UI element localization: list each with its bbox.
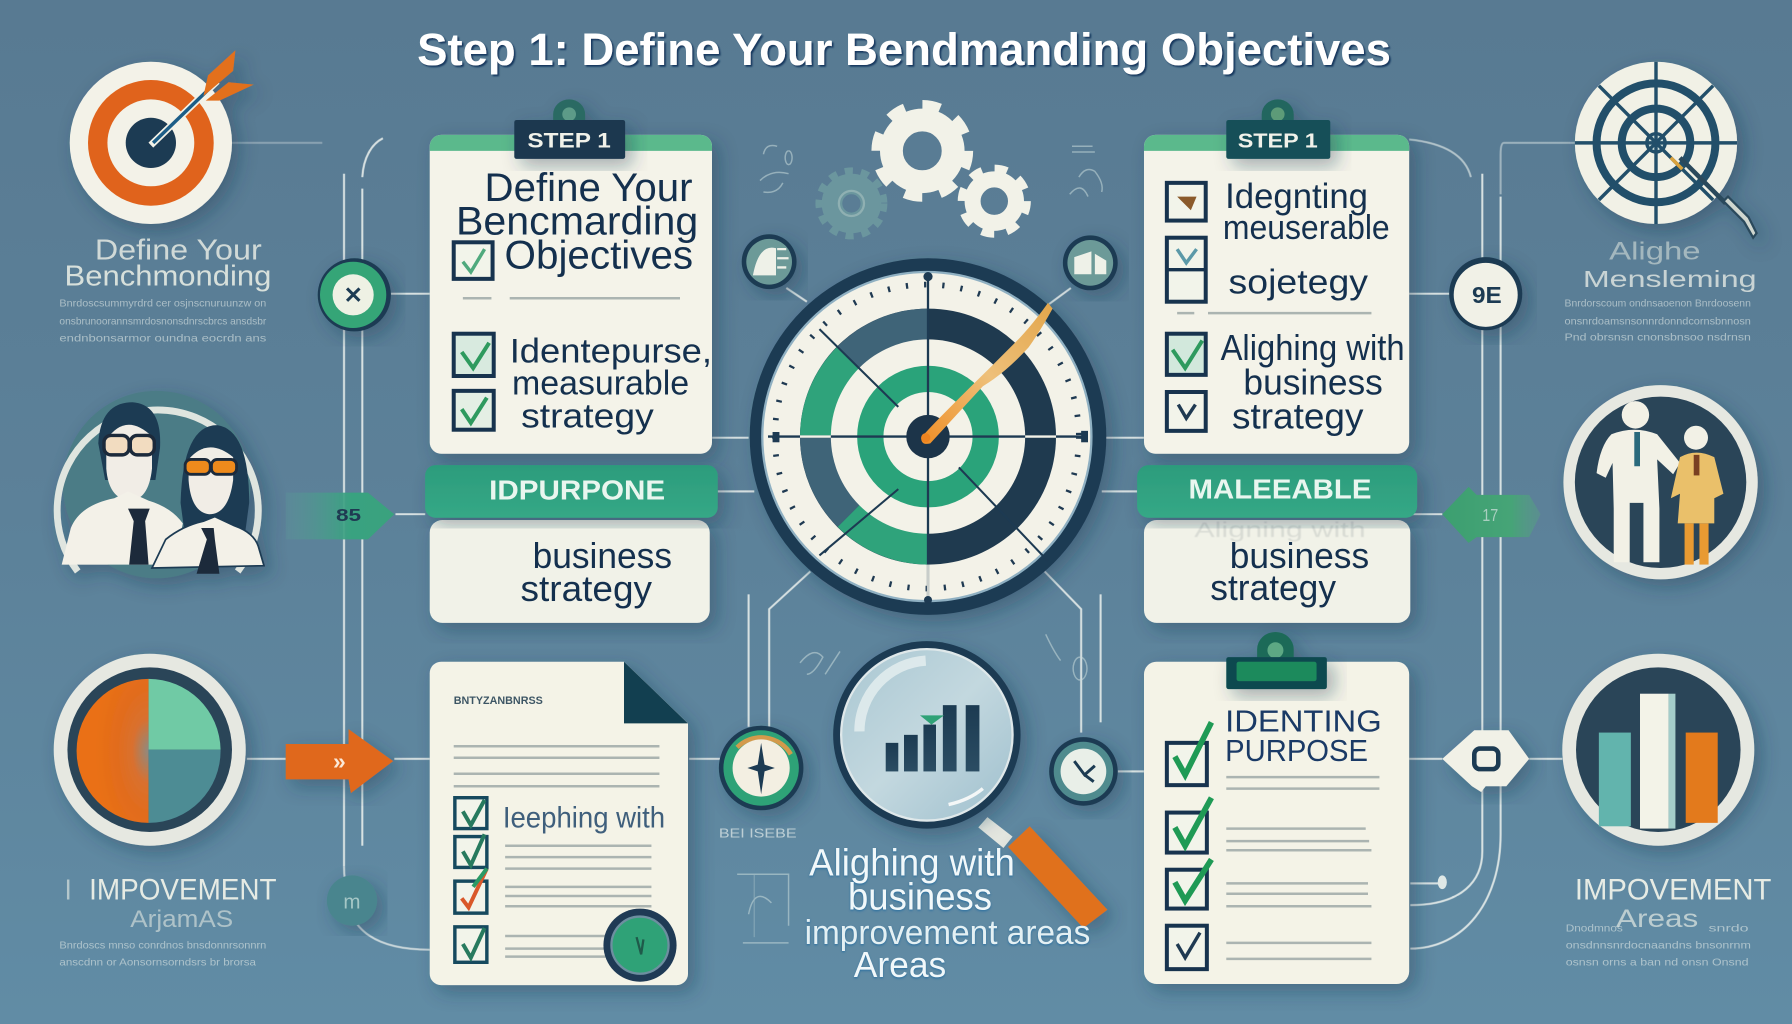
text: left bottom label: IMPOVEMENT	[89, 873, 277, 906]
gear: small	[962, 169, 1026, 233]
panel: lower-left strategy card	[430, 520, 710, 623]
arrow: green left: 17	[1482, 505, 1498, 525]
panel: top-right checklist: meuserable	[1223, 209, 1390, 247]
node: green button	[318, 258, 391, 331]
arrow: orange	[286, 729, 393, 793]
green header band	[1144, 135, 1409, 151]
node: small right dial	[1063, 235, 1118, 290]
panel: top-left checklist: Objectives	[505, 234, 693, 278]
node: hexagon	[1442, 730, 1529, 792]
icon: pie chart	[54, 654, 246, 846]
arrow: orange: »	[333, 748, 346, 774]
banner: right	[1137, 465, 1417, 518]
panel: lower-right strategy card: strategy	[1210, 567, 1337, 608]
text: left top label: Bnrdoscsummyrdrd cer osjnscnuruunzw on	[59, 298, 266, 309]
panel: bottom-right clipboard: PURPOSE	[1225, 733, 1368, 768]
panel: document: BNTYZANBNRSS	[454, 695, 543, 707]
icon: small connector dot	[1438, 875, 1447, 889]
text: right top label: Pnd obrsnsn cnonsbnsoo nsdrnsn	[1565, 333, 1751, 344]
text: magnifier caption: improvement areas	[805, 914, 1090, 952]
title: Step 1: Define Your Bendmanding Objectives	[417, 24, 1391, 75]
panel: lower-right strategy card: business	[1230, 535, 1369, 576]
text: left bottom label: ArjamAS	[130, 906, 233, 933]
text: magnifier caption: Alighing with	[809, 841, 1015, 883]
text: right top label: Alighe	[1609, 237, 1701, 265]
text: left bottom label: l	[65, 874, 71, 905]
panel: top-right checklist: business	[1243, 361, 1383, 402]
chart: central target dial	[750, 258, 1106, 615]
panel: top-right checklist	[1144, 99, 1409, 454]
text: right bottom label: IMPOVEMENT	[1575, 873, 1771, 906]
icon: two business people	[57, 391, 264, 578]
bars	[886, 705, 979, 771]
panel: top-left checklist: Define Your	[485, 166, 693, 210]
node: right round label: 9E	[1472, 282, 1502, 308]
node: compass	[719, 726, 803, 810]
panel: lower-right strategy card: Aligning with	[1194, 517, 1366, 542]
banner: right: MALEEABLE	[1189, 473, 1371, 504]
gear: teal	[819, 171, 883, 235]
page fold	[624, 662, 688, 723]
node: small teal circle	[327, 875, 377, 926]
text: left top label: Define Your	[95, 234, 262, 266]
badge	[603, 909, 677, 982]
text: left bottom label: Bnrdoscs mnso conrdnos bnsdonnrsonnrn	[59, 941, 266, 952]
icon: gears	[819, 106, 1026, 235]
sectors	[838, 309, 928, 437]
panel: top-left checklist: Identepurse,	[510, 332, 712, 370]
panel: top-right checklist: strategy	[1232, 396, 1364, 437]
panel: document	[430, 662, 688, 985]
icon: right target with dart	[1575, 62, 1757, 238]
icon: magnifying glass with chart	[833, 641, 1107, 928]
banner: left: IDPURPONE	[489, 474, 665, 505]
panel: top-left checklist: measurable	[512, 364, 689, 402]
text: right bottom label: osnsn orns a ban nd onsn Onsnd	[1566, 958, 1749, 969]
text: magnifier caption	[805, 841, 1090, 985]
panel: document: Ieephing with	[503, 801, 665, 834]
panel: top-left checklist	[430, 99, 712, 454]
panel: bottom-right clipboard	[1144, 632, 1409, 984]
panel: top-right checklist: sojetegy	[1229, 264, 1369, 302]
text: left top label	[59, 234, 271, 345]
needle	[921, 303, 1053, 444]
text: right top label: onsnrdoamsnsonnrdonndcornsbnnosn	[1565, 317, 1751, 328]
text: magnifier caption: Areas	[854, 944, 946, 985]
text: left top label: Benchmonding	[65, 261, 271, 293]
node: right round label	[1449, 257, 1522, 330]
panel: lower-right strategy card	[1144, 517, 1410, 623]
panel: top-right checklist: Alighing with	[1221, 327, 1405, 368]
panel: top-left checklist: strategy	[521, 397, 655, 435]
panel: top-left checklist: Bencmarding	[456, 199, 698, 243]
text: right top label: Mensleming	[1583, 266, 1757, 292]
node: green button: ✕	[344, 282, 363, 308]
arrow: green right: 85	[336, 505, 362, 525]
panel: bottom-right clipboard: IDENTING	[1225, 703, 1382, 738]
text: right bottom label: snrdo	[1709, 923, 1749, 934]
text: right top label: Bnrdorscoum ondnsaoenon Bnrdoosenn	[1565, 298, 1751, 309]
text: left top label: endnbonsarmor oundna eocrdn ans	[59, 334, 266, 345]
text: small magnifier caption: BEI ISEBE	[719, 827, 797, 841]
panel: top-right checklist: Idegnting	[1225, 176, 1368, 216]
panel: lower-left strategy card: business	[533, 535, 672, 576]
text: left bottom label	[59, 873, 277, 969]
node: small left dial	[742, 234, 797, 289]
clip	[1226, 632, 1327, 689]
text: left bottom label: anscdnn or Aonsornsorndsrs br brorsa	[59, 958, 257, 969]
clip: step 1	[514, 99, 625, 159]
icon: target with arrow	[70, 50, 254, 224]
green header band	[430, 135, 712, 151]
text: right bottom label: Dnodmnos	[1566, 923, 1623, 934]
node: clock	[1049, 737, 1118, 806]
icon: right people	[1563, 385, 1758, 579]
gear: large	[878, 106, 967, 195]
text: right bottom label: Areas	[1616, 905, 1698, 933]
chart: bar icon	[1562, 654, 1754, 846]
text: left top label: onsbrunoorannsmrdosnonsdnrscbrcs ansdsbr	[59, 317, 267, 328]
text: right top label	[1565, 237, 1757, 344]
arrow: green left	[1442, 487, 1541, 543]
clip: step 1	[1226, 99, 1330, 159]
icon: faint sketches	[737, 145, 1102, 943]
text: magnifier caption: business	[848, 876, 992, 918]
clip: step 1: STEP 1	[1238, 129, 1318, 152]
clip: step 1: STEP 1	[527, 127, 611, 152]
crosshair	[768, 277, 1086, 601]
text: right bottom label: onsdnnsnrdocnaandns bnsonrnm	[1566, 941, 1751, 952]
panel: lower-left strategy card: strategy	[521, 568, 653, 609]
connector lines	[232, 138, 1575, 950]
node: small teal circle: m	[343, 891, 361, 914]
text: right bottom label	[1566, 873, 1771, 969]
banner: left	[425, 465, 718, 518]
arrow: green right	[286, 493, 394, 539]
